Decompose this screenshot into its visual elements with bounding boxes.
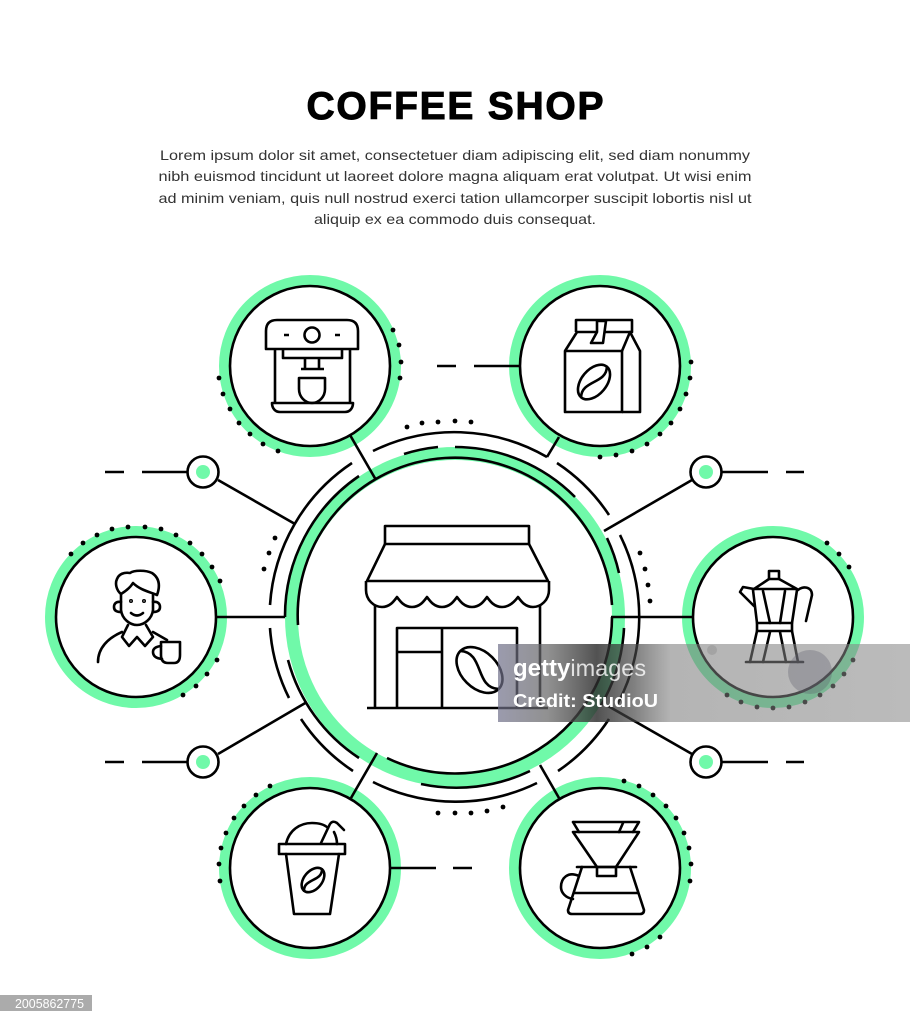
icon: iced coffee cup <box>279 822 345 914</box>
icon: moka pot <box>740 571 812 662</box>
icon: coffee bag <box>565 320 640 412</box>
node: lower right <box>690 746 722 778</box>
image id tag: 2005862775 <box>15 997 84 1011</box>
node: upper left <box>188 456 218 488</box>
icon: espresso machine <box>266 320 358 412</box>
watermark banner <box>498 644 910 722</box>
icon: barista with cup <box>98 571 180 663</box>
title: COFFEE SHOP <box>306 85 604 128</box>
circle: bottom right <box>514 782 686 954</box>
circle: top right <box>514 280 686 452</box>
watermark wordmark: gettyimages <box>513 655 646 682</box>
image id tag <box>0 995 92 1011</box>
intro text block <box>158 147 752 227</box>
decorative dots <box>69 328 855 956</box>
circle: bottom left <box>224 782 396 954</box>
circle: left <box>50 532 222 702</box>
circle: right <box>688 532 858 702</box>
watermark credit: Credit: StudioU <box>513 691 658 711</box>
node: upper right <box>690 456 722 488</box>
node: lower left <box>188 746 218 778</box>
connector lines and dashes <box>105 366 804 868</box>
intro text block: aliquip ex ea commodo duis consequat. <box>314 211 596 227</box>
icon: coffee shop storefront <box>366 526 549 708</box>
circle: top left <box>224 280 396 452</box>
intro text block: nibh euismod tincidunt ut laoreet dolore magna aliquam erat volutpat. Ut wisi enim <box>158 168 752 184</box>
central hub rings <box>270 432 639 802</box>
intro text block: ad minim veniam, quis null nostrud exerci tation ullamcorper suscipit lobortis nisl ut <box>158 190 752 206</box>
icon: pour-over dripper <box>561 822 644 914</box>
intro text block: Lorem ipsum dolor sit amet, consectetuer diam adipiscing elit, sed diam nonummy <box>160 147 750 163</box>
